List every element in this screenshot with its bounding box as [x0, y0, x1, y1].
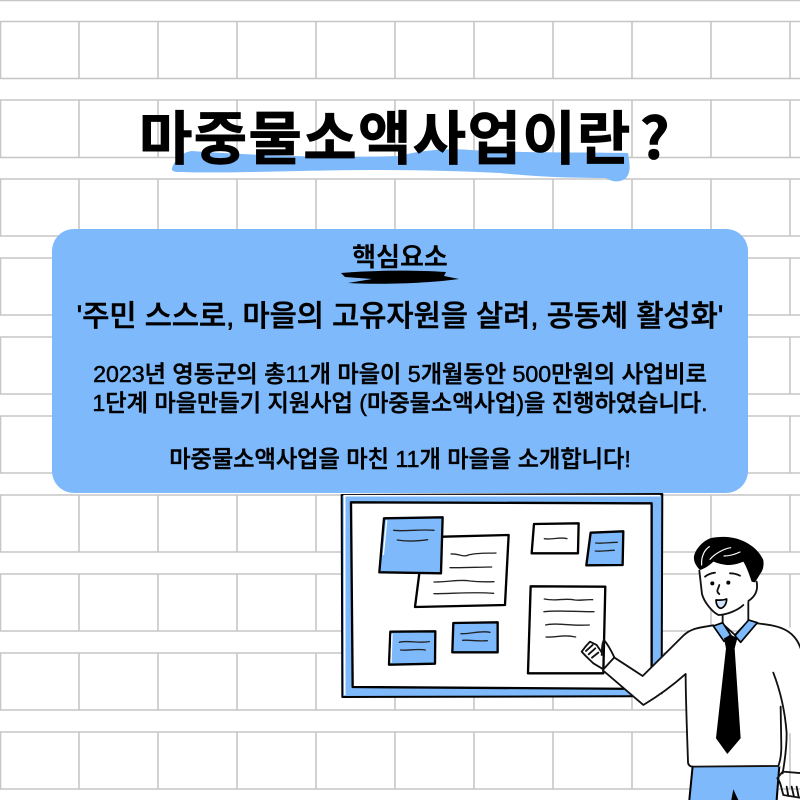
description text: 1단계 마을만들기 지원사업 (마중물소액사업)을 진행하였습니다. [92, 390, 708, 416]
large white paper [528, 586, 605, 673]
board frame [342, 494, 662, 697]
title brush highlight [172, 149, 630, 181]
description text: 마중물소액사업을 마친 11개 마을을 소개합니다! [169, 446, 631, 472]
panel: core elements [52, 229, 748, 493]
facial features [705, 573, 740, 608]
collar [713, 620, 757, 642]
tie [716, 635, 741, 754]
board surface [351, 502, 652, 689]
trousers [689, 766, 780, 800]
shirt and arm [603, 623, 800, 767]
description text [92, 361, 708, 472]
face [699, 560, 757, 615]
heading brush underline [341, 271, 459, 284]
title: 마중물소액사업이란? [139, 92, 671, 176]
pointing hand [582, 640, 614, 669]
panel heading: 핵심요소 [352, 242, 448, 272]
neck [723, 600, 748, 635]
small blue note right [586, 531, 623, 565]
blue sticky note [379, 517, 443, 573]
hair [694, 537, 764, 582]
key phrase: '주민 스스로, 마을의 고유자원을 살려, 공동체 활성화' [77, 300, 723, 333]
white note with text lines [415, 535, 509, 607]
lower hand [777, 772, 800, 798]
illustration: bulletin board [342, 494, 662, 697]
illustration: presenting man [582, 537, 800, 800]
blue note lower left [389, 631, 435, 665]
description text: 2023년 영동군의 총11개 마을이 5개월동안 500만원의 사업비로 [93, 361, 707, 387]
small white note [532, 523, 579, 553]
blue note lower middle [452, 622, 498, 652]
